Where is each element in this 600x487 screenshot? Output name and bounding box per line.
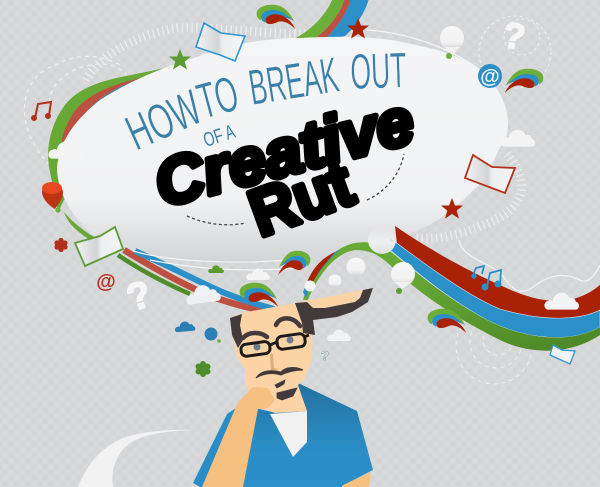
thin white wave line [459, 240, 600, 291]
swirl: lower right [428, 309, 466, 333]
cloud: on wave [544, 293, 579, 310]
book: red [465, 155, 515, 193]
cloud: beside head [327, 329, 351, 341]
swirl: head right [278, 251, 310, 275]
title line: how to break out: BREAK [245, 48, 343, 116]
springs [86, 28, 522, 238]
title line: how to break out [117, 43, 407, 161]
at sign: red: @ [96, 271, 116, 293]
star: green [169, 49, 191, 70]
at sign: blue: @ [480, 66, 500, 88]
bulb: blue [204, 328, 221, 343]
cloud: green [208, 265, 224, 273]
cloud: white small [246, 268, 270, 280]
shirt [240, 383, 373, 487]
speech bubble [57, 37, 508, 263]
title line: creative: Creative [147, 83, 421, 221]
title line: how to break out: HOW [117, 78, 210, 161]
cloud: left [48, 142, 83, 159]
dashed underlines [187, 154, 404, 225]
eyes [254, 336, 294, 350]
man [193, 288, 373, 487]
right forearm [342, 472, 371, 487]
star: top red [347, 18, 369, 38]
ribbons: left [48, 68, 165, 240]
bulb: red [42, 182, 63, 213]
dashed circles: left [24, 56, 127, 165]
nose [270, 354, 279, 371]
title [117, 43, 421, 250]
book: small blue [550, 345, 575, 364]
bulb: top right [440, 26, 464, 59]
question mark: top right: ? [500, 14, 529, 58]
face [230, 303, 312, 413]
cloud: right [500, 130, 535, 147]
ribbons: right wave [303, 226, 600, 351]
music notes: blue [472, 266, 501, 290]
head flap hair and right hair [295, 288, 373, 335]
swirl: above head [240, 283, 278, 307]
flower: red [54, 238, 68, 252]
head flap skin [295, 290, 363, 308]
goatee [275, 380, 297, 400]
title line: of a: OF A [200, 119, 238, 151]
title line: how to break out: TO [191, 65, 244, 130]
glasses [240, 333, 309, 357]
cloud: over lower ribbon [185, 283, 221, 305]
music note: red [32, 102, 51, 120]
title line: rut: Rut [239, 145, 363, 250]
star: lower red [441, 198, 463, 218]
arm and hand [202, 387, 275, 487]
mustache [256, 368, 303, 378]
bulbs and spheres above head [304, 226, 415, 294]
undershirt [270, 411, 307, 457]
ribbons: top [292, 0, 369, 42]
hair left [230, 314, 243, 348]
left sleeve [193, 408, 258, 487]
question mark: left: ? [122, 273, 157, 320]
swirl: top [257, 5, 295, 29]
cloud: blue [174, 321, 195, 332]
dashed circles: lower right [456, 308, 532, 384]
bubble outline arcs [133, 30, 480, 270]
title line: how to break out: OUT [349, 43, 407, 100]
white swoosh [78, 430, 193, 487]
book: green [75, 227, 123, 266]
dashed circles: upper right [479, 16, 551, 88]
ribbons: lower left [118, 250, 274, 311]
eyebrows [243, 318, 300, 338]
book: blue top [196, 23, 245, 61]
flower: green [196, 361, 210, 377]
question mark: tiny: ? [321, 348, 329, 363]
swirl: right [505, 69, 543, 93]
